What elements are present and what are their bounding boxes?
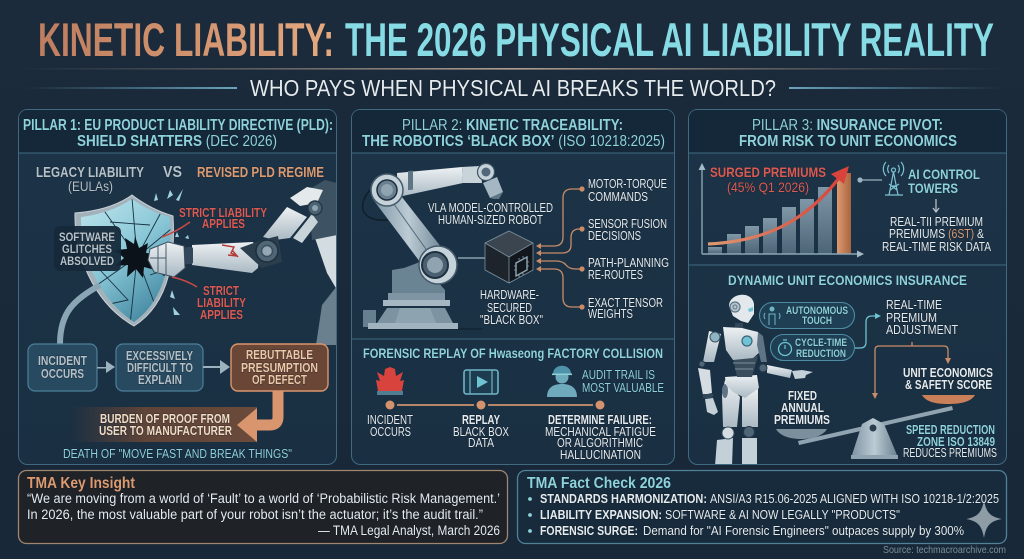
- label: speed reduction zone: ZONE ISO 13849: [917, 435, 995, 449]
- label: hardware-secured black box: "BLACK BOX": [480, 313, 543, 327]
- icon: sparkle: [966, 500, 1002, 538]
- label: hardware-secured black box: HARDWARE-: [480, 288, 539, 302]
- text: real-time premiums: [882, 215, 992, 254]
- arrow: shield to incident: [60, 285, 100, 344]
- pill: autonomous touch: AUTONOMOUS: [786, 305, 848, 317]
- callout: strict liability applies top: [162, 205, 267, 237]
- box: rebuttable presumption of defect: [231, 344, 328, 391]
- pill: autonomous touch: TOUCH: [802, 315, 832, 327]
- box: excessively difficult to explain: DIFFICULT TO: [127, 361, 193, 375]
- label: speed reduction zone: SPEED REDUCTION: [906, 423, 995, 437]
- arrow: cycle-time to adjustment: [855, 313, 881, 348]
- label: unit economics and safety score: UNIT ECONOMICS: [903, 366, 993, 380]
- bullet: standards harmonization: STANDARDS HARMONIZATION:: [540, 491, 707, 506]
- quote: In 2026, the most valuable part of your robot isn’t the actuator; it’s the audit trail.”: [27, 507, 483, 522]
- text: real-time premium adjustment: REAL-TIME: [886, 297, 942, 312]
- heading: forensic replay: FORENSIC REPLAY OF Hwaseong FACTORY COLLISION: [363, 345, 663, 361]
- chart: surged premiums: [698, 163, 864, 258]
- list: logged data types: DECISIONS: [588, 229, 641, 243]
- callout: strict liability applies top: APPLIES: [202, 216, 245, 231]
- box: excessively difficult to explain: [116, 344, 203, 391]
- icon: control tower: [883, 162, 904, 195]
- icon: humanoid robot: [698, 295, 813, 466]
- callout: strict liability applies bottom: STRICT: [203, 283, 239, 298]
- callout: strict liability applies bottom: APPLIES: [200, 307, 243, 322]
- step: determine failure: MECHANICAL FATIGUE: [545, 425, 656, 439]
- callout: software glitches absolved: GLITCHES: [62, 242, 112, 256]
- panel: pillar 3 insurance pivot: [688, 110, 1006, 466]
- label: fixed annual premiums: PREMIUMS: [774, 413, 830, 427]
- comparison labels: [36, 164, 324, 194]
- step: determine failure: HALLUCINATION: [560, 448, 641, 462]
- text: real-time premium adjustment: ADJUSTMENT: [886, 322, 958, 337]
- callout: audit trail: AUDIT TRAIL IS: [582, 368, 655, 382]
- heading: pillar 2: [362, 117, 665, 150]
- callout: burden of proof: [70, 391, 278, 442]
- panel: TMA key insight: [18, 470, 508, 544]
- heading: pillar 1: PILLAR 1: EU PRODUCT LIABILITY DIRECTIVE (PLD):: [23, 117, 333, 134]
- bullet: forensic surge: [528, 523, 964, 538]
- timeline: [386, 400, 604, 410]
- heading: pillar 3: [739, 117, 957, 150]
- step: replay black box data: [453, 413, 510, 450]
- step: replay black box data: BLACK BOX: [453, 425, 510, 439]
- quote: [27, 491, 500, 538]
- icon: shattered shield: [75, 189, 189, 326]
- icon: balance scale: [776, 395, 975, 459]
- heading: dynamic unit economics: DYNAMIC UNIT ECONOMICS INSURANCE: [728, 272, 967, 288]
- comparison labels: VS: [163, 164, 182, 181]
- box: incident occurs: [28, 344, 97, 391]
- box: incident occurs: INCIDENT: [38, 354, 87, 368]
- callout: software glitches absolved: SOFTWARE: [59, 230, 115, 244]
- list: logged data types: COMMANDS: [588, 190, 648, 204]
- bullet: forensic surge: Demand for "AI Forensic Engineers" outpaces supply by 300%: [643, 523, 964, 538]
- heading: pillar 1: [23, 117, 333, 150]
- heading: pillar 1: SHIELD SHATTERS (DEC 2026): [77, 133, 277, 150]
- label: VLA robot: [428, 201, 553, 227]
- connectors: data inputs to black box: [536, 186, 585, 310]
- pill: cycle-time reduction: [770, 334, 854, 360]
- text: real-time premiums: REAL-TII PREMIUM: [890, 215, 983, 229]
- chart: surged premiums: SURGED PREMIUMS: [710, 164, 826, 180]
- comparison labels: REVISED PLD REGIME: [197, 164, 324, 181]
- label: hardware-secured black box: [480, 288, 543, 327]
- source credit: Source: techmacroarchive.com: [883, 544, 1006, 556]
- heading: fact check: TMA Fact Check 2026: [527, 475, 671, 492]
- text: real-time premiums: REAL-TIME RISK DATA: [882, 240, 992, 254]
- callout: audit trail: [582, 368, 664, 395]
- panel: TMA fact check: [518, 470, 1006, 544]
- step: incident occurs: INCIDENT: [367, 413, 413, 427]
- callout: software glitches absolved: ABSOLVED: [60, 254, 114, 268]
- quote: “We are moving from a world of ‘Fault’ to a world of ‘Probabilistic Risk Management.’: [27, 491, 500, 506]
- label: fixed annual premiums: FIXED: [788, 389, 817, 403]
- subtitle: WHO PAYS WHEN PHYSICAL AI BREAKS THE WORLD?: [250, 75, 776, 101]
- label: unit economics and safety score: & SAFETY SCORE: [905, 378, 992, 392]
- connector: chart to tower: [857, 177, 882, 183]
- bullet: standards harmonization: [528, 491, 999, 506]
- arrow: [97, 361, 115, 373]
- box: incident occurs: OCCURS: [41, 367, 84, 381]
- step: determine failure: OR ALGORITHMIC: [557, 436, 643, 450]
- label: unit economics and safety score: [903, 366, 993, 392]
- caption: death of move fast: DEATH OF "MOVE FAST AND BREAK THINGS": [63, 447, 292, 461]
- label: speed reduction zone: [903, 423, 997, 460]
- box: rebuttable presumption of defect: OF DEFECT: [252, 373, 307, 387]
- callout: strict liability applies top: STRICT LIABILITY: [179, 205, 267, 220]
- heading: pillar 3: PILLAR 3: INSURANCE PIVOT:: [752, 117, 943, 134]
- list: logged data types: [588, 177, 669, 321]
- heading: pillar 2: THE ROBOTICS ‘BLACK BOX’ (ISO 10218:2025): [362, 133, 665, 150]
- list: logged data types: WEIGHTS: [588, 307, 633, 321]
- icon: black box cube: [485, 231, 533, 283]
- text: real-time premiums: PREMIUMS (6ST) &: [889, 227, 985, 241]
- list: logged data types: SENSOR FUSION: [588, 217, 667, 231]
- callout: burden of proof: USER TO MANUFACTURER: [99, 424, 232, 438]
- list: logged data types: PATH-PLANNING: [588, 256, 669, 270]
- chart: surged premiums: (45% Q1 2026): [727, 179, 809, 195]
- quote: — TMA Legal Analyst, March 2026: [318, 523, 500, 538]
- bullet: liability expansion: LIABILITY EXPANSION:: [540, 507, 662, 522]
- bullet: liability expansion: SOFTWARE & AI NOW LEGALLY "PRODUCTS": [665, 507, 900, 522]
- step: replay black box data: DATA: [468, 436, 495, 450]
- label: fixed annual premiums: [774, 389, 830, 427]
- panel: pillar 1 EU product liability directive: [18, 110, 337, 464]
- text: real-time premium adjustment: PREMIUM: [886, 310, 937, 325]
- step: determine failure: DETERMINE FAILURE:: [548, 413, 652, 427]
- icon: robot fist: [148, 242, 185, 277]
- label: VLA robot: VLA MODEL-CONTROLLED: [428, 201, 553, 215]
- label: AI control towers: AI CONTROL: [908, 166, 980, 182]
- connector: robot to black box: [458, 257, 485, 259]
- list: logged data types: RE-ROUTES: [588, 268, 643, 282]
- list: logged data types: EXACT TENSOR: [588, 296, 663, 310]
- bullet: liability expansion: [528, 507, 900, 522]
- label: VLA robot: HUMAN-SIZED ROBOT: [438, 213, 543, 227]
- callout: software glitches absolved: [54, 226, 121, 271]
- callout: strict liability applies bottom: LIABILITY: [197, 295, 246, 310]
- bullet: forensic surge: FORENSIC SURGE:: [540, 523, 638, 538]
- label: hardware-secured black box: SECURED: [487, 301, 532, 315]
- box: excessively difficult to explain: EXPLAIN: [138, 373, 182, 387]
- box: rebuttable presumption of defect: REBUTTABLE: [246, 348, 313, 362]
- arrow: [203, 360, 230, 374]
- icon: video player: [464, 370, 498, 394]
- box: rebuttable presumption of defect: PRESUMPTION: [241, 361, 318, 375]
- heading: pillar 3: FROM RISK TO UNIT ECONOMICS: [739, 133, 957, 150]
- text: real-time premium adjustment: [886, 297, 958, 337]
- callout: strict liability applies bottom: [172, 277, 246, 322]
- arrow: tower to data: [933, 199, 939, 212]
- title: KINETIC LIABILITY:: [38, 13, 334, 66]
- icon: robot arm punching: [185, 180, 337, 345]
- icon: industrial robot arm: [363, 164, 503, 329]
- arrows: adjustment to scale: [872, 342, 951, 399]
- callout: audit trail: MOST VALUABLE: [582, 381, 664, 395]
- box: excessively difficult to explain: EXCESSIVELY: [126, 349, 194, 363]
- heading: pillar 2: PILLAR 2: KINETIC TRACEABILITY:: [402, 117, 623, 134]
- icon: siren: [376, 367, 404, 395]
- heading: key insight: TMA Key Insight: [27, 475, 135, 492]
- label: AI control towers: TOWERS: [908, 180, 958, 196]
- step: incident occurs: OCCURS: [370, 425, 411, 439]
- label: AI control towers: [908, 166, 980, 196]
- comparison labels: (EULAs): [68, 178, 113, 194]
- comparison labels: LEGACY LIABILITY: [36, 164, 144, 181]
- pill: autonomous touch: [760, 302, 854, 328]
- callout: burden of proof: BURDEN OF PROOF FROM: [100, 412, 230, 426]
- label: fixed annual premiums: ANNUAL: [781, 401, 824, 415]
- step: replay black box data: REPLAY: [462, 413, 501, 427]
- step: incident occurs: [367, 413, 413, 439]
- step: determine failure: [545, 413, 656, 462]
- panel: pillar 2 kinetic traceability: [352, 110, 674, 464]
- pill: cycle-time reduction: REDUCTION: [796, 348, 846, 360]
- list: logged data types: MOTOR-TORQUE: [588, 177, 667, 191]
- pill: cycle-time reduction: CYCLE-TIME: [795, 337, 847, 349]
- icon: worker: [547, 366, 577, 397]
